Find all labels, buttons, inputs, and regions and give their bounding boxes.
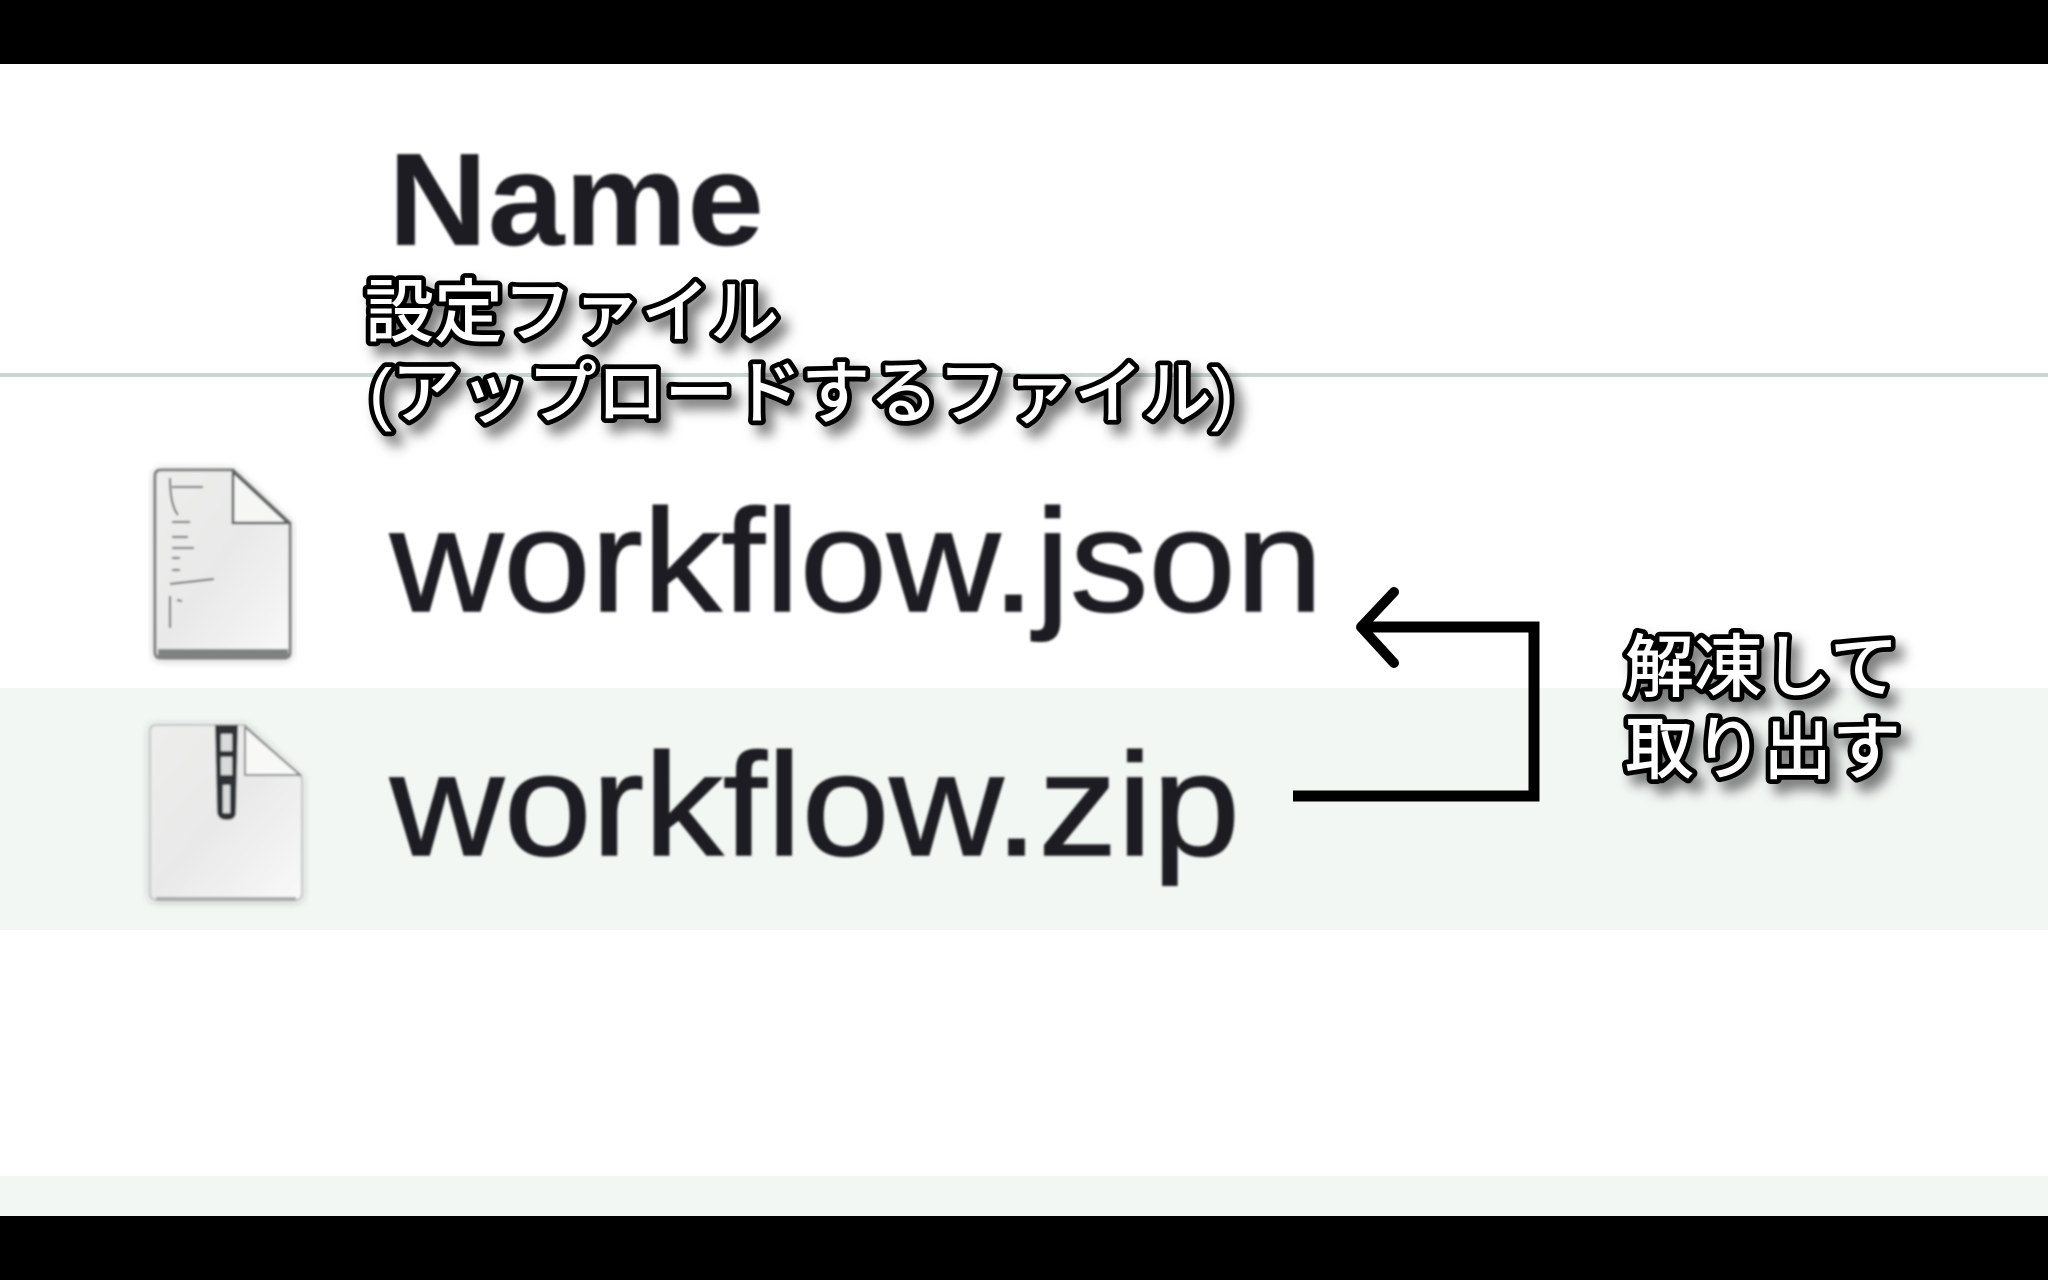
callout: config file label: (アップロードするファイル) xyxy=(369,355,1234,432)
filename: workflow.json: workflow.json xyxy=(389,479,1323,642)
column heading: Name: Name xyxy=(388,126,764,273)
callout: extract label xyxy=(1625,629,1901,788)
callout: extract label: 取り出す xyxy=(1625,711,1901,788)
bottom row band xyxy=(0,1176,2048,1216)
bottom letterbox bar xyxy=(0,1216,2048,1280)
selected row band: workflow.zip xyxy=(0,688,2048,930)
arrow: zip to json xyxy=(1293,592,1534,796)
filename: workflow.zip: workflow.zip xyxy=(389,723,1240,886)
icon: zip archive xyxy=(150,725,302,901)
top letterbox bar xyxy=(0,0,2048,64)
callout: extract label: 解凍して xyxy=(1625,629,1899,706)
column header divider xyxy=(0,373,2048,377)
callout: config file label xyxy=(365,274,1234,432)
callout: config file label: 設定ファイル xyxy=(365,274,779,351)
icon: json document xyxy=(155,470,290,658)
